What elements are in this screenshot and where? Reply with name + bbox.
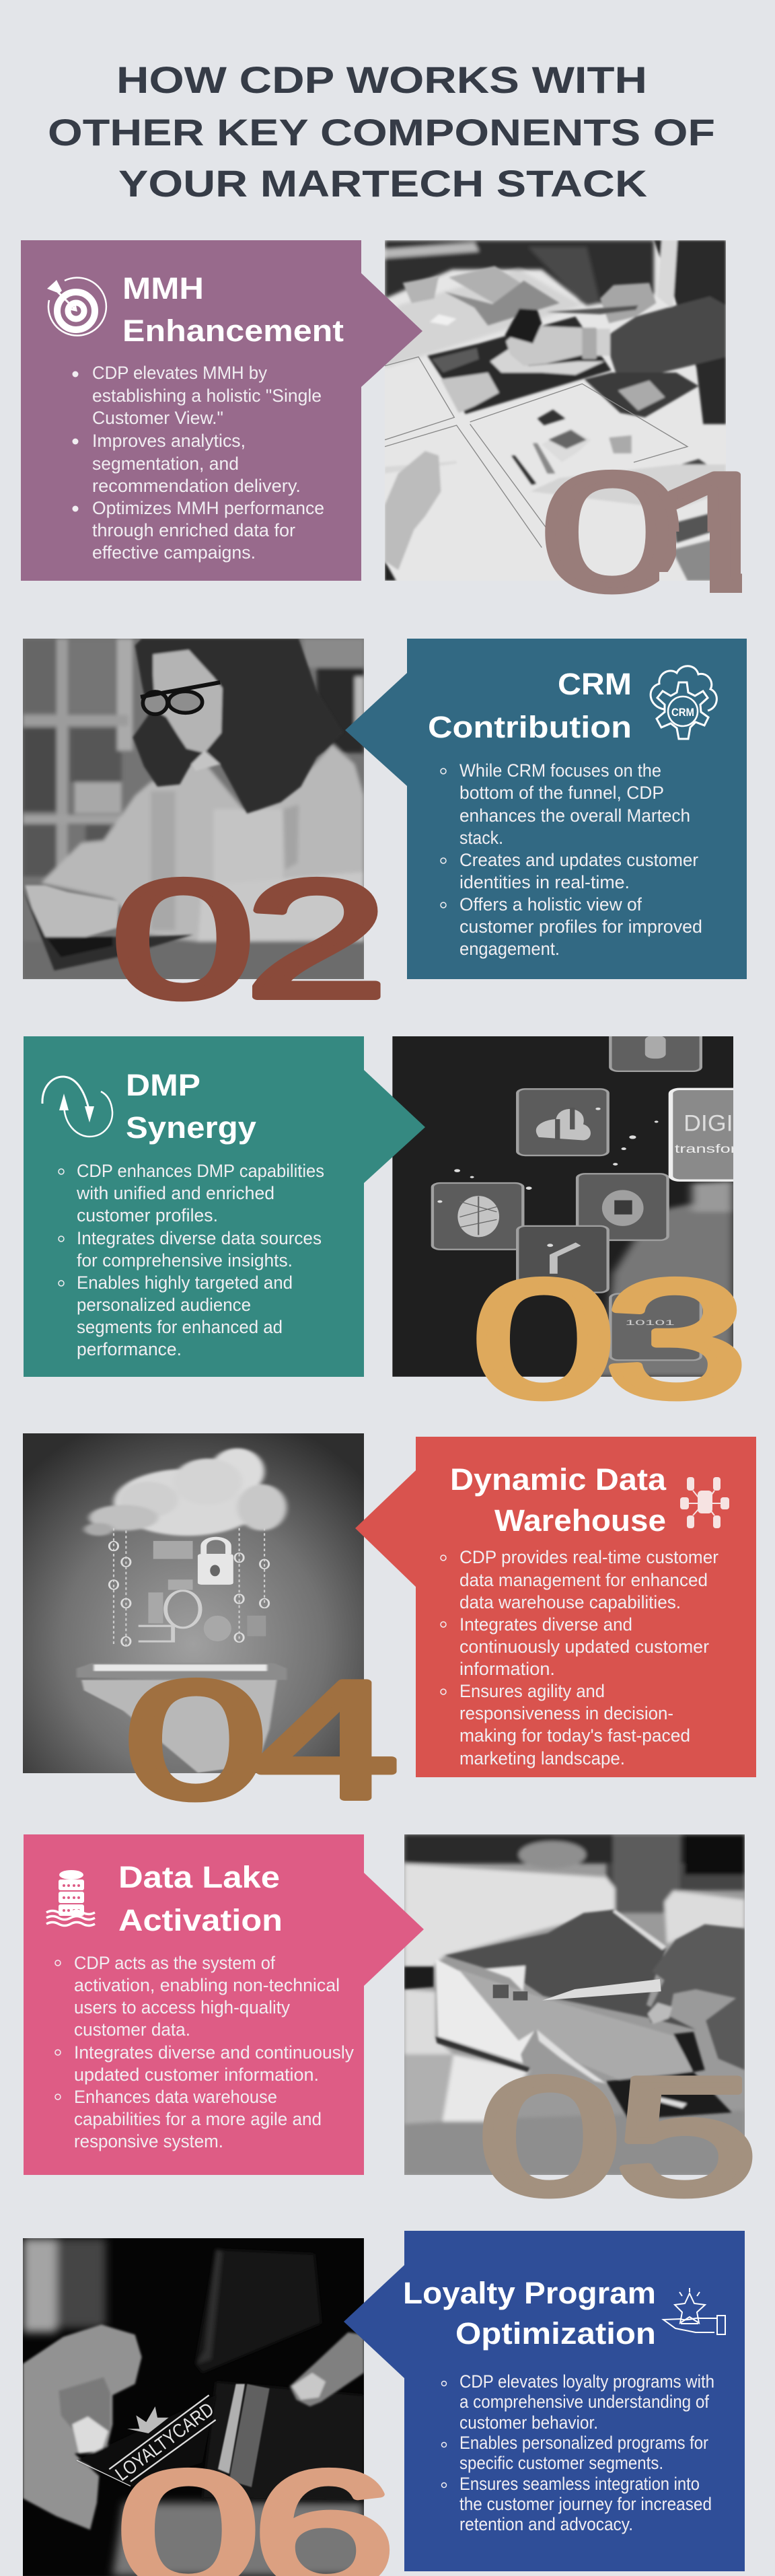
heading: Activation (118, 1903, 283, 1937)
panel: Loyalty Program Optimization (344, 2231, 745, 2571)
bullet list: Optimizes MMH performance (92, 498, 324, 518)
panel: Dynamic Data Warehouse (355, 1437, 756, 1777)
icon: database standing in water (46, 1870, 95, 1926)
bullet list: responsiveness in decision- (459, 1703, 673, 1723)
bullet list: identities in real-time. (459, 872, 630, 892)
heading (428, 667, 632, 744)
heading: Data Lake (118, 1860, 280, 1894)
bullet list: Enables personalized programs for (459, 2433, 708, 2453)
bullet list: data management for enhanced (459, 1570, 708, 1590)
photo: hand touching digital transformation tiles: DIGI (684, 1110, 733, 1136)
bullet list: Ensures seamless integration into (459, 2474, 700, 2494)
section 03: DMP Synergy (24, 1032, 750, 1432)
section 04: Dynamic Data Warehouse (23, 1433, 756, 1833)
heading: Contribution (428, 710, 632, 744)
heading: Enhancement (122, 314, 344, 348)
bullet list: capabilities for a more agile and (74, 2109, 322, 2129)
bullet list: a comprehensive understanding of (459, 2392, 709, 2412)
title: OTHER KEY COMPONENTS OF (48, 111, 715, 153)
heading (122, 271, 344, 348)
section 05: Data Lake Activation (24, 1834, 758, 2229)
heading: Dynamic Data (450, 1462, 667, 1497)
bullet list: continuously updated customer (459, 1637, 709, 1657)
icon: sync arrows (42, 1077, 112, 1137)
bullet list: through enriched data for (92, 520, 295, 540)
heading (403, 2276, 656, 2351)
bullet list: engagement. (459, 939, 560, 959)
bullet list (441, 760, 702, 959)
panel: CRM Contribution (345, 639, 747, 979)
bullet list: recommendation delivery. (92, 476, 301, 496)
panel: DMP Synergy (24, 1036, 425, 1377)
heading: Warehouse (494, 1503, 666, 1538)
bullet list (59, 1161, 324, 1359)
bullet list: Ensures agility and (459, 1681, 605, 1701)
bullet list (55, 1953, 354, 2151)
bullet list: segmentation, and (92, 454, 239, 474)
bullet list: segments for enhanced ad (77, 1317, 283, 1337)
bullet list: information. (459, 1659, 555, 1679)
bullet list: activation, enabling non-technical (74, 1975, 340, 1995)
icon: cloud with CRM gear: CRM (671, 706, 694, 719)
bullet list: for comprehensive insights. (77, 1250, 293, 1271)
bullet list: Offers a holistic view of (459, 894, 642, 915)
bullet list: Enables highly targeted and (77, 1273, 293, 1293)
photo: hand touching digital transformation tiles: transfor (675, 1142, 737, 1155)
bullet list: data warehouse capabilities. (459, 1592, 681, 1612)
section 01: MMH Enhancement (21, 240, 742, 595)
bullet list: responsive system. (74, 2131, 223, 2151)
bullet list: customer data. (74, 2019, 190, 2040)
bullet list: Improves analytics, (92, 431, 246, 451)
bullet list: specific customer segments. (459, 2453, 663, 2473)
bullet list: making for today's fast-paced (459, 1725, 690, 1746)
bullet list: users to access high-quality (74, 1997, 290, 2017)
bullet list: establishing a holistic "Single (92, 386, 322, 406)
photo: hands working on a paper board (385, 240, 726, 581)
number 02: 02 (111, 845, 388, 1032)
bullet list: updated customer information. (74, 2065, 319, 2085)
section 06: Loyalty Program Optimization (23, 2231, 745, 2576)
heading: MMH (122, 271, 204, 306)
heading: Synergy (126, 1110, 256, 1145)
bullet list: Integrates diverse and (459, 1614, 632, 1635)
bullet list: customer profiles. (77, 1205, 218, 1225)
heading: DMP (126, 1068, 200, 1102)
bullet list: CDP elevates MMH by (92, 363, 267, 383)
number 03: 03 (472, 1245, 748, 1432)
photo: hand pulling a loyalty card from a wallet: LOYALTYCARD (112, 2398, 218, 2485)
bullet list: effective campaigns. (92, 542, 256, 563)
bullet list (441, 1547, 718, 1768)
section 02: CRM Contribution (23, 639, 747, 1032)
bullet list: performance. (77, 1339, 182, 1359)
heading: Loyalty Program (403, 2276, 656, 2310)
bullet list: CDP enhances DMP capabilities (77, 1161, 324, 1181)
bullet list: CDP provides real-time customer (459, 1547, 718, 1567)
bullet list: the customer journey for increased (459, 2494, 712, 2514)
panel: Data Lake Activation (24, 1834, 424, 2175)
icon: connected databases (680, 1477, 729, 1528)
bullet list: customer behavior. (459, 2412, 598, 2433)
heading: CRM (558, 667, 632, 701)
bullet list (73, 363, 324, 563)
heading (118, 1860, 283, 1937)
number 05: 05 (478, 2042, 758, 2229)
photo: cloud floating over a tablet (23, 1433, 364, 1773)
photo: woman with glasses typing on a laptop (23, 639, 364, 980)
bullet list (441, 2371, 714, 2534)
bullet list: personalized audience (77, 1295, 251, 1315)
icon: target with arrow (47, 278, 106, 336)
bullet list: Customer View." (92, 408, 223, 428)
bullet list: stack. (459, 828, 503, 848)
photo: hand pulling a loyalty card from a wallet (23, 2238, 364, 2576)
photo: hand touching digital transformation tiles: 10101 (625, 1318, 675, 1327)
bullet list: with unified and enriched (76, 1183, 274, 1203)
photo: hand touching digital transformation tiles (392, 1032, 750, 1377)
title (48, 59, 715, 205)
icon: cloud with CRM gear (651, 666, 716, 739)
bullet list: retention and advocacy. (459, 2514, 633, 2534)
bullet list: Enhances data warehouse (74, 2087, 277, 2107)
bullet list: bottom of the funnel, CDP (459, 783, 664, 803)
bullet list: customer profiles for improved (459, 917, 702, 937)
bullet list: While CRM focuses on the (459, 760, 661, 781)
bullet list: Integrates diverse and continuously (74, 2042, 354, 2063)
bullet list: Creates and updates customer (459, 850, 698, 870)
heading: Optimization (455, 2316, 656, 2351)
bullet list: marketing landscape. (459, 1748, 625, 1768)
bullet list: CDP elevates loyalty programs with (459, 2371, 714, 2392)
bullet list: enhances the overall Martech (459, 806, 690, 826)
bullet list: CDP acts as the system of (74, 1953, 275, 1973)
number 04: 04 (124, 1646, 399, 1833)
icon: star held in a hand (663, 2288, 725, 2334)
title: HOW CDP WORKS WITH (116, 59, 647, 101)
photo: hands using a stylus on a tablet (404, 1834, 745, 2175)
bullet list: Integrates diverse data sources (77, 1228, 322, 1248)
heading (126, 1068, 256, 1145)
panel: MMH Enhancement (21, 240, 422, 581)
heading (450, 1462, 667, 1538)
title: YOUR MARTECH STACK (118, 162, 647, 205)
